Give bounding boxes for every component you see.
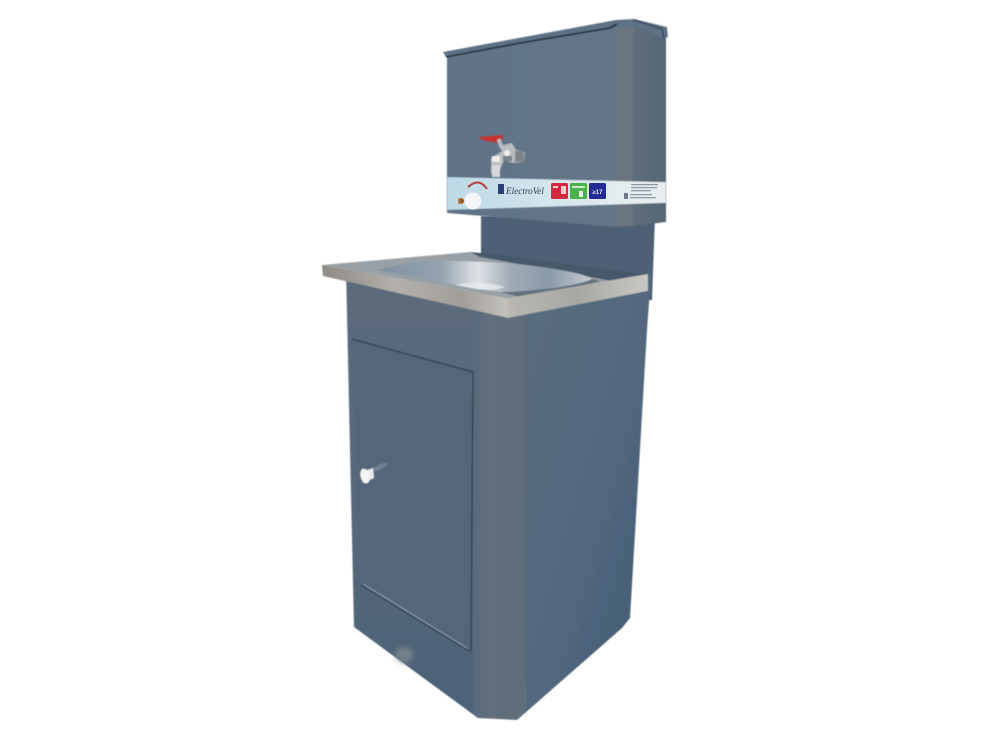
scuff mark bbox=[395, 647, 413, 663]
water tank bbox=[443, 19, 668, 227]
door lower seam bbox=[361, 585, 469, 651]
tank front face bbox=[447, 27, 616, 227]
sink front edge bbox=[322, 265, 508, 318]
door knob bbox=[359, 461, 388, 484]
label strip bbox=[447, 177, 666, 210]
tap handle bbox=[479, 135, 503, 143]
tank side face bbox=[633, 22, 666, 226]
cabinet corner post bbox=[473, 295, 531, 720]
thermostat scale bbox=[468, 182, 487, 189]
red badge bbox=[551, 183, 568, 199]
sink bowl bbox=[377, 261, 592, 294]
thermostat knob bbox=[458, 192, 482, 210]
tap bbox=[479, 135, 525, 177]
brand logo: ElectroVel bbox=[505, 186, 544, 196]
cabinet door bbox=[351, 339, 473, 652]
blue badge bbox=[589, 183, 606, 199]
sink side edge bbox=[508, 274, 648, 318]
green badge bbox=[570, 183, 587, 199]
blue badge: ≥17 bbox=[593, 190, 603, 196]
rear column behind sink bbox=[481, 216, 655, 300]
tank lid bbox=[443, 19, 668, 57]
sink top surface bbox=[322, 252, 648, 298]
cabinet left face bbox=[346, 270, 484, 718]
tank corner strip bbox=[615, 22, 634, 227]
lower cabinet bbox=[346, 270, 651, 720]
brand logo bbox=[498, 184, 544, 196]
cabinet right face bbox=[525, 275, 651, 713]
steel sink bbox=[322, 252, 648, 318]
fine-print block bbox=[624, 184, 658, 199]
tap body bbox=[491, 143, 525, 176]
